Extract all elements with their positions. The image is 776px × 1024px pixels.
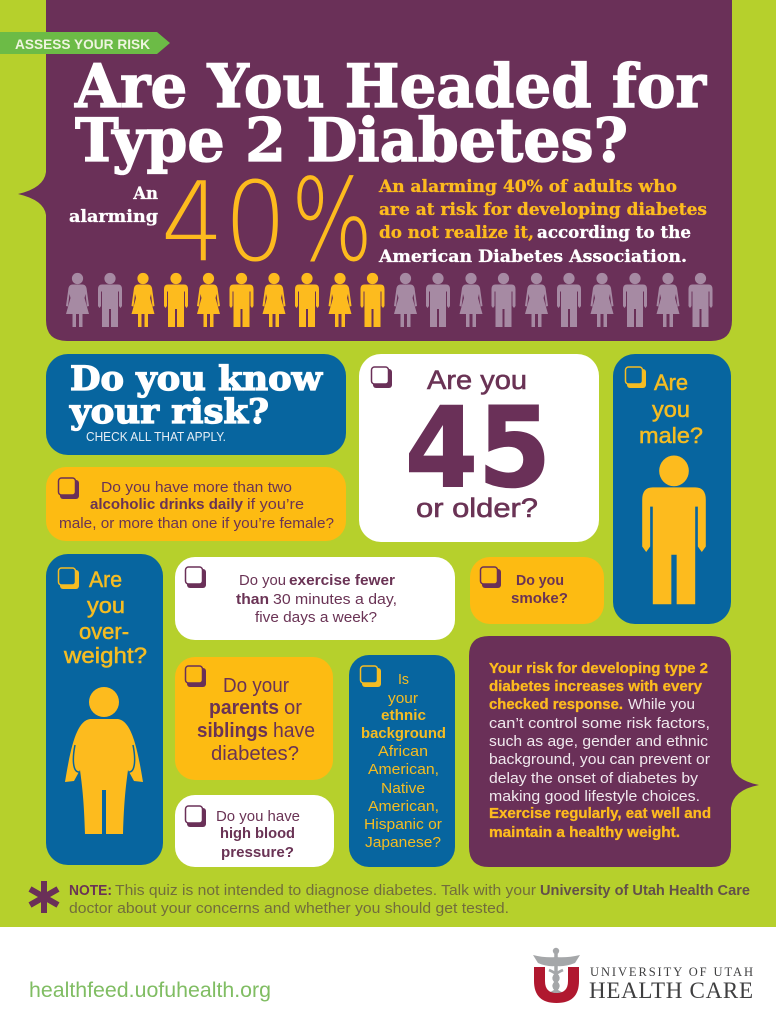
panel: family history question: or (284, 697, 302, 719)
icon: caduceus and U (533, 948, 580, 1003)
panel: male question: you (652, 397, 690, 422)
panel: smoking question: Do you (516, 572, 564, 589)
text: an alarming (69, 184, 158, 226)
title (74, 52, 707, 176)
text: statistic: do not realize it, (379, 223, 534, 242)
big number: 40% (161, 154, 373, 287)
text: statistic: are at risk for developing diabetes (379, 200, 707, 219)
note: doctor about your concerns and whether you should get tested. (69, 901, 509, 917)
callout: risk explanation: such as age, gender and ethnic (489, 733, 709, 750)
callout: risk explanation: Your risk for developing type 2 (489, 660, 708, 677)
panel: alcohol question (46, 467, 346, 541)
icon: checkbox (186, 806, 206, 827)
panel: exercise question: than (236, 591, 269, 608)
panel: ethnic background question: background (361, 725, 446, 742)
panel: family history question: have (273, 720, 315, 742)
text: statistic: according to the (537, 223, 691, 242)
logo: university of utah health care: UNIVERSITY OF UTAH (590, 965, 753, 979)
panel: male question (613, 354, 731, 624)
panel: family history question: Do your (223, 675, 289, 697)
panel: exercise question (175, 557, 455, 640)
panel: ethnic background question: American, (368, 761, 439, 778)
panel: alcohol question: male, or more than one if you’re female? (59, 515, 334, 532)
panel: ethnic background question: ethnic (381, 707, 426, 724)
icon: checkbox (186, 567, 206, 588)
footer (0, 927, 776, 1024)
panel: ethnic background question: African (378, 743, 428, 760)
panel: blood pressure question (175, 795, 334, 867)
panel: age question: 45 (405, 384, 551, 513)
panel: age question: Are you (427, 365, 527, 395)
callout: risk explanation: Exercise regularly, eat well and (489, 805, 711, 822)
panel: exercise question: five days a week? (255, 609, 377, 626)
callout: risk explanation: delay the onset of diabetes by (489, 770, 699, 787)
note: University of Utah Health Care (540, 883, 750, 899)
icon: checkbox (372, 367, 392, 388)
icon: checkbox (58, 568, 79, 589)
panel: exercise question: 30 minutes a day, (273, 591, 397, 608)
panel: alcohol question: alcoholic drinks daily (90, 496, 244, 513)
icon: male figure (642, 455, 706, 604)
panel: ethnic background question: Is (398, 671, 409, 688)
panel: ethnic background question: your (388, 690, 418, 707)
panel: smoking question: smoke? (511, 590, 568, 607)
panel: family history question (175, 657, 333, 780)
pictogram: 20 people, 8 highlighted (66, 273, 712, 327)
big number: 40%: 40 (161, 158, 287, 286)
callout: risk explanation: While you (628, 696, 695, 713)
callout: risk explanation: checked response. (489, 696, 623, 713)
icon: checkbox (58, 478, 79, 499)
panel: overweight question: Are (89, 567, 122, 592)
callout: risk explanation: diabetes increases with every (489, 678, 703, 695)
panel: alcohol question: if you’re (247, 496, 304, 513)
text: statistic: American Diabetes Association. (378, 247, 687, 266)
tag: assess your risk: ASSESS YOUR RISK (15, 36, 150, 52)
panel: overweight question (46, 554, 163, 865)
panel: header (0, 0, 732, 341)
icon: checkbox (186, 666, 206, 687)
panel: smoking question (470, 557, 604, 624)
icon: checkbox (360, 666, 381, 687)
callout: risk explanation: making good lifestyle choices. (489, 788, 700, 805)
tag: assess your risk (0, 32, 170, 54)
icon: asterisk (30, 881, 58, 913)
panel: overweight question: weight? (63, 643, 147, 668)
panel: male question: Are (654, 370, 688, 395)
panel: do you know your risk: Do you know (70, 359, 323, 399)
note: This quiz is not intended to diagnose diabetes. Talk with your (115, 883, 536, 899)
callout: risk explanation: maintain a healthy weight. (489, 824, 680, 841)
panel: ethnic background question: Native (381, 780, 425, 797)
panel: age question (359, 354, 599, 542)
title: Type 2 Diabetes? (75, 106, 628, 176)
icon: overweight figure (65, 687, 143, 834)
panel: do you know your risk (46, 354, 346, 455)
panel: blood pressure question: pressure? (221, 844, 294, 861)
panel: male question: male? (639, 423, 703, 448)
callout: risk explanation: background, you can prevent or (489, 751, 710, 768)
text: statistic: An alarming 40% of adults who (378, 177, 677, 196)
text: statistic (378, 177, 707, 266)
panel: family history question: diabetes? (211, 743, 299, 765)
text: an alarming: An (132, 184, 158, 203)
callout: risk explanation: can’t control some risk factors, (489, 715, 710, 732)
logo: university of utah health care (533, 948, 753, 1003)
panel: alcohol question: Do you have more than two (101, 479, 292, 496)
note (69, 883, 750, 917)
title: Are You Headed for (74, 52, 707, 122)
icon: checkbox (626, 367, 646, 388)
text: an alarming: alarming (69, 207, 158, 226)
panel: ethnic background question: Japanese? (365, 834, 441, 851)
panel: blood pressure question: high blood (220, 825, 295, 842)
panel: do you know your risk: CHECK ALL THAT APPLY. (86, 430, 226, 444)
panel: overweight question: over- (79, 619, 129, 644)
icon: checkbox (480, 567, 501, 588)
logo: university of utah health care: HEALTH CARE (589, 978, 753, 1003)
panel: blood pressure question: Do you have (216, 808, 300, 825)
panel: age question: or older? (416, 493, 538, 523)
panel: exercise question: exercise fewer (289, 572, 395, 589)
panel: ethnic background question: American, (368, 798, 439, 815)
panel: exercise question: Do you (239, 572, 286, 589)
panel: do you know your risk: your risk? (69, 392, 269, 432)
website url: healthfeed.uofuhealth.org (29, 979, 271, 1002)
note: NOTE: (69, 883, 112, 899)
panel: ethnic background question: Hispanic or (364, 816, 442, 833)
panel: family history question: siblings (197, 720, 268, 742)
panel: ethnic background question (349, 655, 455, 867)
big number: 40%: % (291, 154, 373, 287)
panel: family history question: parents (209, 697, 279, 719)
panel: overweight question: you (87, 593, 125, 618)
callout: risk explanation (469, 636, 759, 867)
